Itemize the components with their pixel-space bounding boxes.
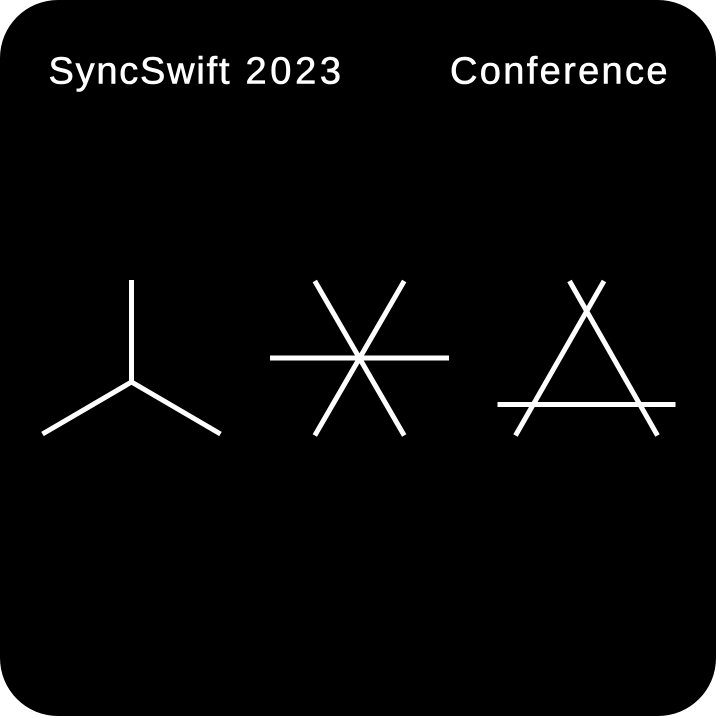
icon: crossed-line triangle <box>498 281 676 436</box>
heading: Conference: Conference <box>450 50 668 92</box>
title: SyncSwift 2023 <box>48 50 341 92</box>
title: SyncSwift 2023: SyncSwift <box>48 50 230 92</box>
icon: six-armed star <box>270 281 449 436</box>
icon: three-armed star <box>42 280 220 434</box>
title: SyncSwift 2023: 2023 <box>246 50 341 92</box>
